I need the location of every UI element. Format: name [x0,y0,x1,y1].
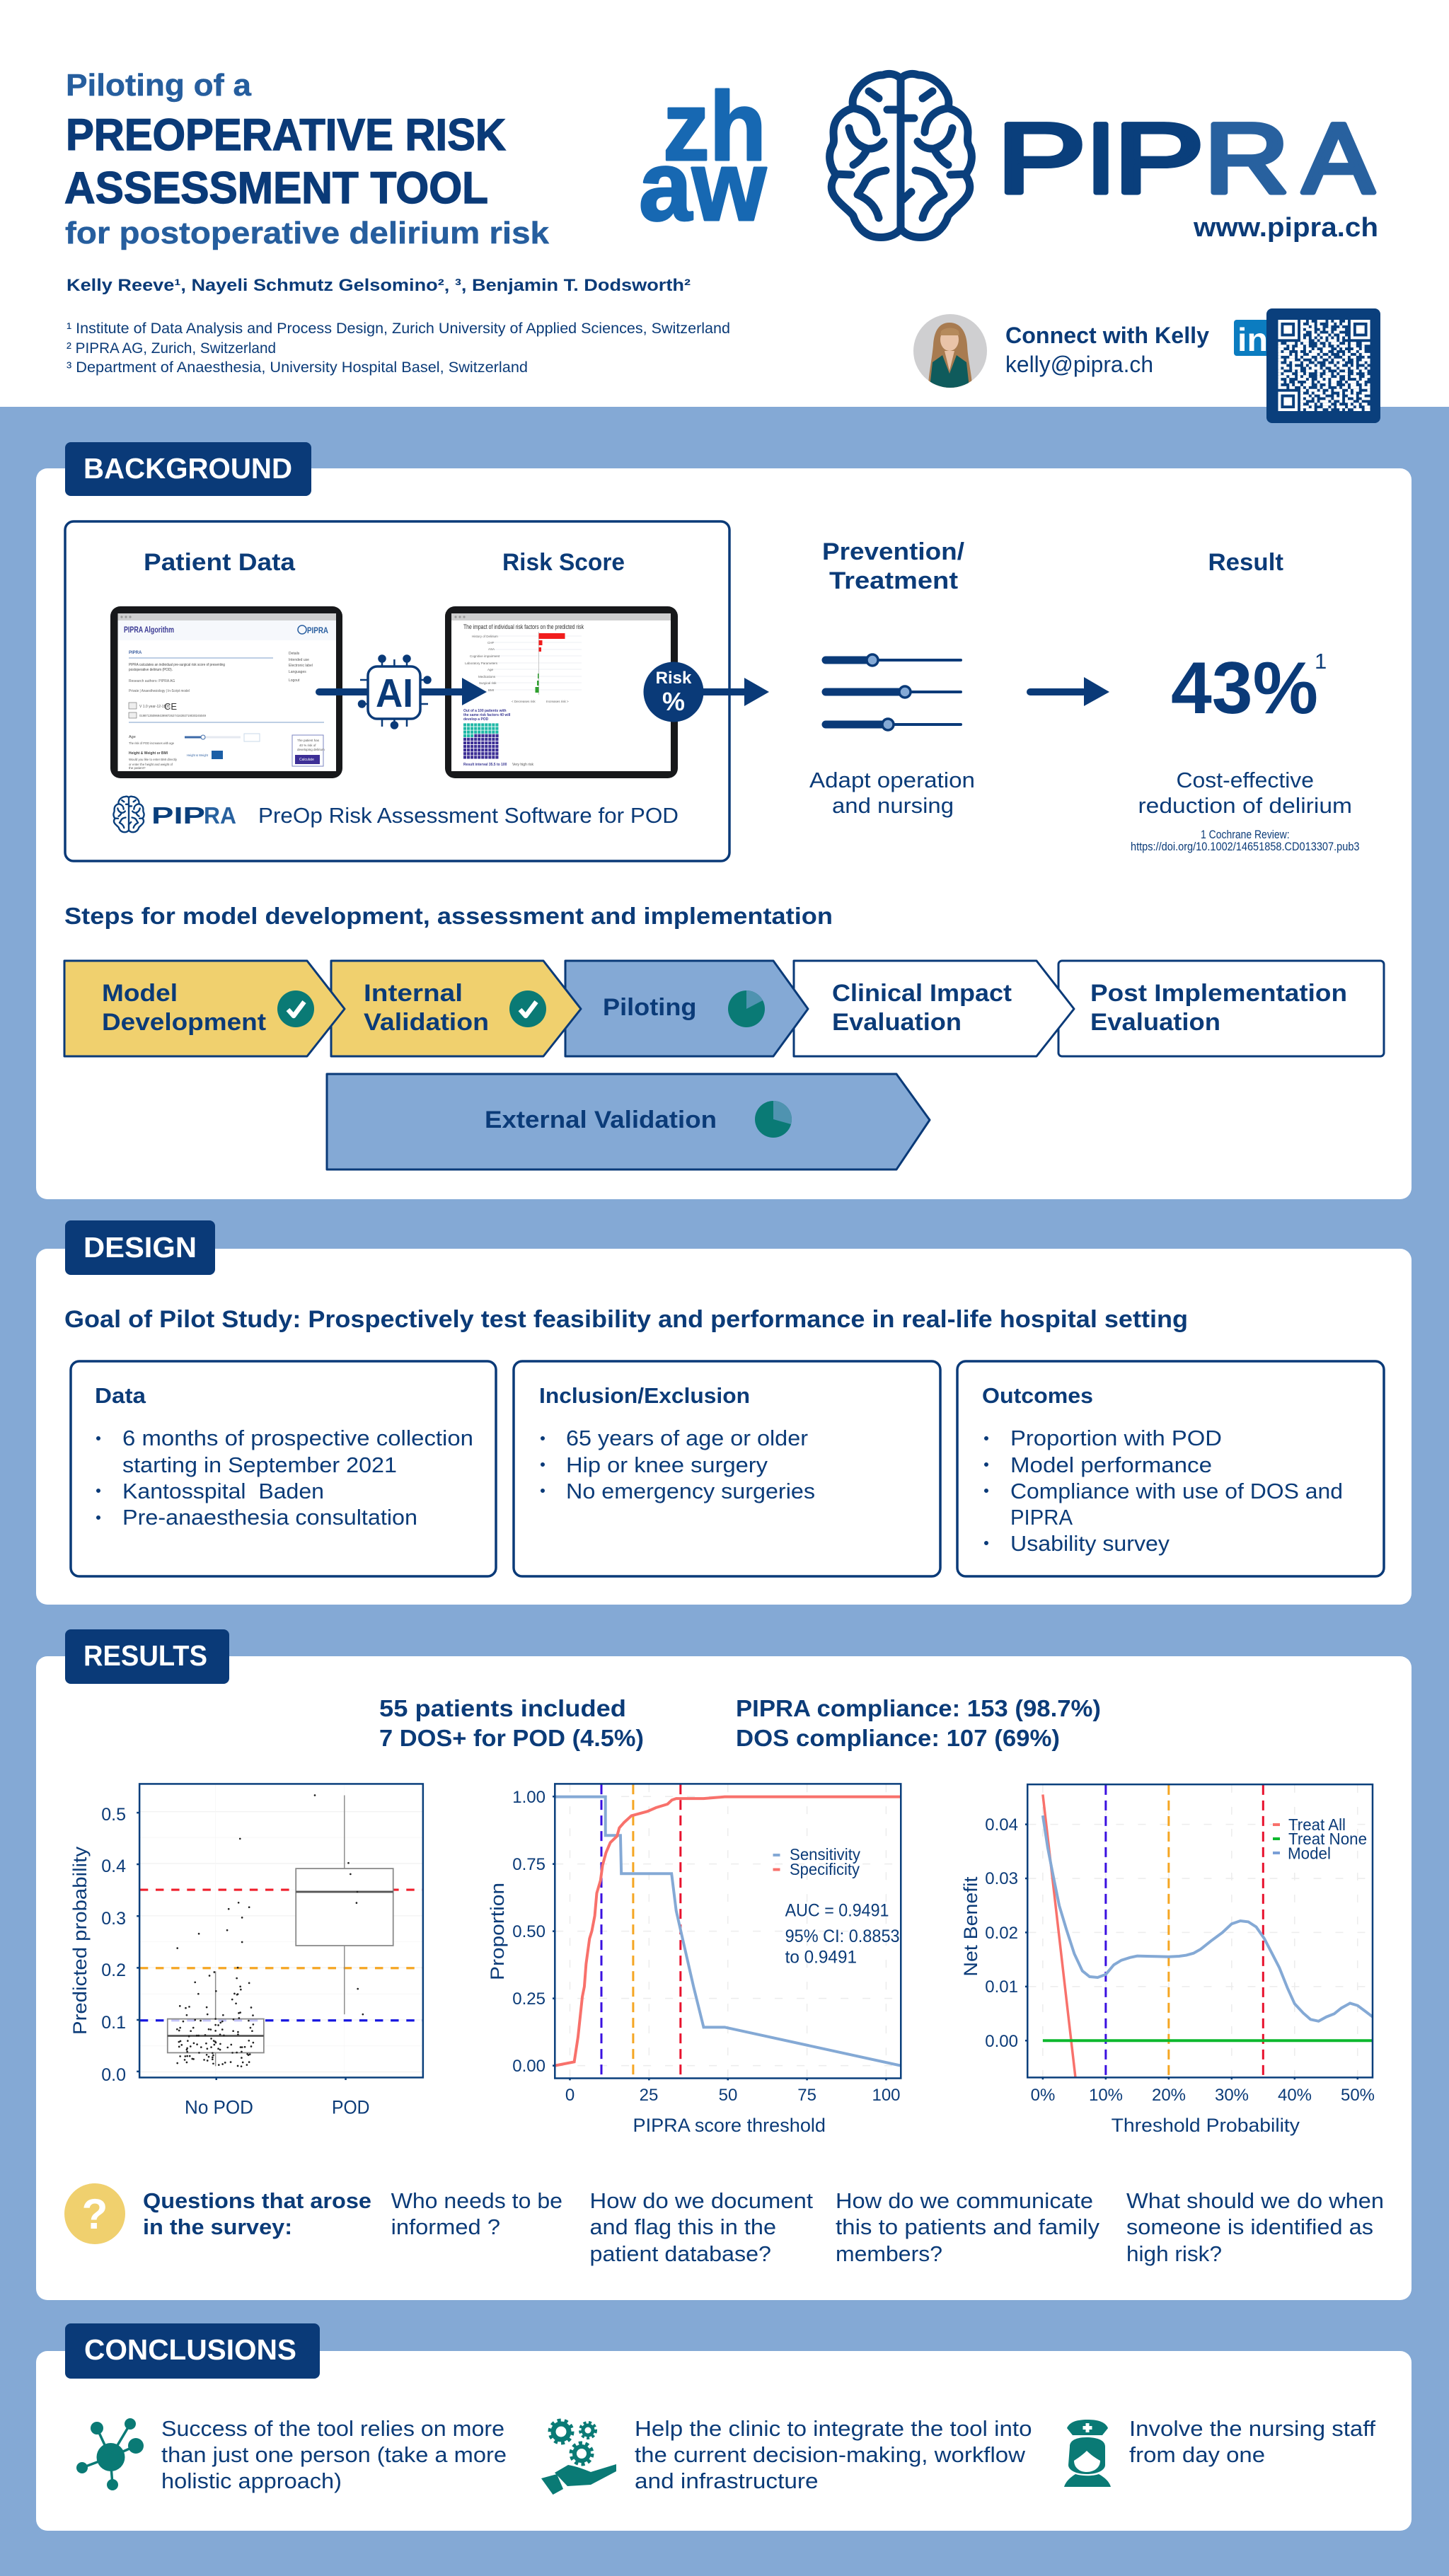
panel: conclusions [36,2323,1412,2531]
survey questions [64,2183,1384,2266]
column: result: reduction of delirium [1138,793,1352,818]
tablet: input form: PIPRA calculates an individual pre-surgical risk score of presenting [129,663,225,667]
contact text: kelly@pipra.ch [1005,352,1153,377]
card: data: 6 months of prospective collection [122,1426,473,1450]
chart: sensitivity and specificity: 50 [719,2086,737,2105]
title block: Piloting of a [66,68,252,103]
tablet: input form: Height & Weight [187,753,209,757]
affiliations [67,320,730,376]
card: data: Pre-anaesthesia consultation [122,1505,417,1530]
axis labels: 0.0 [101,2065,126,2085]
affiliations: ³ Department of Anaesthesia, University Hospital Basel, Switzerland [67,359,528,376]
authors: Kelly Reeve¹, Nayeli Schmutz Gelsomino²‚ ³, Benjamin T. Dodsworth² [67,276,691,295]
tablet: input form: V 1.0 year-12-1508 [139,705,170,709]
question 2: How do we document [590,2188,813,2213]
title block: ASSESSMENT TOOL [64,163,488,213]
heading: risk score: Risk Score [502,549,625,576]
question 2: patient database? [590,2241,771,2266]
heading: BACKGROUND: BACKGROUND [83,452,292,485]
tablet: risk output: The impact of individual risk factors on the predicted risk [463,623,584,630]
conclusion 2: and infrastructure [635,2468,819,2493]
software box [65,521,729,861]
step: clinical impact evaluation: Evaluation [832,1009,962,1036]
chart: sensitivity and specificity: 100 [872,2086,901,2105]
tablet: input form: Research authors: PIPRA AG [129,679,175,683]
conclusion 3: from day one [1129,2442,1265,2467]
tablet: input form: 40 % risk of [299,744,316,747]
step: internal validation [331,961,581,1056]
goal statement: Goal of Pilot Study: Prospectively test feasibility and performance in real-life hospital setting [64,1306,1188,1333]
chart: decision curve net benefit: 40% [1278,2086,1312,2105]
panel: results [36,1629,1412,2300]
column: result: Result [1208,549,1283,576]
chart: decision curve net benefit: 0% [1031,2086,1055,2105]
conclusion 2: Help the clinic to integrate the tool into [635,2416,1032,2441]
question 3 [836,2188,1100,2266]
tablet: risk output: develop a POD [463,717,489,722]
chart: sensitivity and specificity: 25 [640,2086,658,2105]
card: inclusion / exclusion: No emergency surgeries [566,1479,815,1503]
key numbers: compliance: PIPRA compliance: 153 (98.7%) [736,1695,1101,1721]
step: model development: Model [102,980,178,1007]
AUC annotation: 95% CI: 0.8853 [785,1927,900,1946]
card: data: starting in September 2021 [122,1452,397,1477]
card: outcomes [957,1361,1384,1576]
tablet: input form: PIPRA Algorithm [124,625,174,635]
AUC annotation: to 0.9491 [785,1948,857,1968]
step: piloting [565,961,808,1056]
tablet: input form: The risk of POD increases with age [129,741,174,746]
column: prevention / treatment: and nursing [832,793,954,818]
axis labels: 0.1 [101,2013,126,2033]
tablet: risk output: Laboratory Parameters [465,662,498,665]
step: post implementation evaluation: Post Implementation [1090,980,1347,1007]
chart: predicted probability box plot: Predicted probability [69,1846,91,2035]
tablet: input form: Would you like to enter BMI directly [129,758,178,761]
chart: predicted probability box plot [69,1784,423,2118]
legend: Model [1288,1844,1331,1862]
question 1: Who needs to be [391,2188,562,2213]
tablet: input form: Electronic label [289,664,313,668]
chart: sensitivity and specificity: Proportion [487,1883,508,1980]
badge: risk percent: % [662,687,685,716]
tablet: risk output: Medications [478,675,496,678]
question 4: What should we do when [1126,2188,1384,2213]
QR code [1266,308,1380,423]
logo: brain icon [830,74,971,238]
step: post implementation evaluation: Evaluation [1090,1009,1220,1036]
conclusion 2 [635,2416,1032,2493]
tablet: input form: or enter the height and weight of [129,763,173,766]
question 4: someone is identified as [1126,2214,1373,2239]
tablet: risk output: Very high risk [512,763,534,767]
AUC annotation [785,1901,900,1968]
chart: sensitivity and specificity: 0 [565,2086,575,2105]
tablet: input form: CE [164,701,177,712]
survey label: Questions that arose [143,2188,371,2213]
tablet: risk output: < Decreases risk [512,700,536,703]
legend: Treat All [1288,1815,1346,1834]
card: inclusion / exclusion: 65 years of age or older [566,1426,808,1450]
tablet: risk output: the same risk factors 40 will [463,713,511,717]
conclusion 2: the current decision-making, workflow [635,2442,1026,2467]
column: prevention / treatment [809,538,975,818]
heading: CONCLUSIONS: CONCLUSIONS [84,2333,296,2366]
column: prevention / treatment: Treatment [829,567,958,594]
axis labels: 0.5 [101,1805,126,1825]
card: data: Data [95,1383,146,1408]
card: inclusion / exclusion: Inclusion/Exclusion [539,1383,750,1408]
tablet: input form: Details [289,652,300,656]
arrow: patient data to risk score [316,678,487,705]
axis labels: 1.00 [512,1788,545,1807]
conclusion 1: than just one person (take a more [161,2442,507,2467]
conclusion 3 [1129,2416,1375,2467]
affiliations: ¹ Institute of Data Analysis and Process Design, Zurich University of Applied Sciences, Switzerland [67,320,730,337]
key numbers: patients: 7 DOS+ for POD (4.5%) [379,1725,644,1751]
survey label: in the survey: [143,2214,292,2239]
icon: question mark [64,2183,125,2244]
tablet: risk output: Out of a 100 patients with [463,709,507,713]
card: inclusion / exclusion [514,1361,940,1576]
step: clinical impact evaluation: Clinical Impact [832,980,1012,1007]
icon: gears on hand [541,2420,616,2495]
affiliations: ² PIPRA AG, Zurich, Switzerland [67,340,276,357]
chart: decision curve net benefit: Net Benefit [960,1876,981,1977]
panel: background [36,442,1412,2531]
plot area [553,1784,901,2080]
axis labels: 0.2 [101,1960,126,1980]
axis labels: 0.75 [512,1855,545,1874]
legend [1273,1815,1367,1862]
logo: zhaw [639,72,767,241]
AUC annotation: AUC = 0.9491 [785,1901,889,1921]
tablet: risk output [445,606,678,778]
title block [64,68,550,250]
heading: RESULTS: RESULTS [83,1639,207,1672]
column: prevention / treatment: Prevention/ [822,538,965,565]
chart: predicted probability box plot: POD [332,2097,369,2118]
tablet: risk output: History of Delirium [472,635,498,638]
contact text [1005,323,1209,377]
logo: PIPRA wordmark: P [1114,103,1204,214]
tablet: input form: Age [129,735,136,739]
legend [773,1845,860,1878]
logo: zhaw: zh [663,72,766,181]
question 3: this to patients and family [836,2214,1100,2239]
tablet: risk output: Result interval 35.5 to 100 [463,763,507,767]
tablet: risk output: Age [487,668,494,671]
conclusion 1 [161,2416,507,2493]
icon: sliders [826,654,961,730]
chart: decision curve net benefit: Threshold Probability [1112,2115,1300,2136]
axis labels: 0.02 [985,1924,1018,1943]
icon: question mark: ? [82,2190,108,2238]
tablet: input form: Logout [289,678,300,683]
axis labels [985,1815,1018,2051]
portrait photo [913,314,988,388]
heading: DESIGN [65,1220,215,1275]
column: result: https://doi.org/10.1002/14651858.CD013307.pub3 [1131,840,1360,853]
tablet: input form: Calculate [299,758,314,762]
tablet: input form: Languages [289,670,306,674]
conclusion 1: Success of the tool relies on more [161,2416,504,2441]
key numbers: patients [379,1695,644,1751]
tablet: input form: PIPRA [129,651,142,655]
chart: decision curve net benefit: 10% [1089,2086,1123,2105]
logo: small PIPRA: PIP [151,802,205,828]
question 3: How do we communicate [836,2188,1093,2213]
icon: nurse [1064,2420,1111,2487]
logo: small PIPRA: RA [204,802,236,828]
column: result: 1 Cochrane Review: [1201,828,1290,841]
icon: check [509,990,546,1027]
heading: CONCLUSIONS [65,2323,320,2379]
question 2: and flag this in the [590,2214,776,2239]
tablet: risk output: Increases risk > [546,700,569,703]
card: outcomes: Usability survey [1010,1531,1170,1556]
question 3: members? [836,2241,942,2266]
question 1 [391,2188,562,2239]
icon: AI chip [359,655,430,729]
column: prevention / treatment: Adapt operation [809,768,975,792]
axis labels: 0.00 [512,2057,545,2076]
key numbers: compliance: DOS compliance: 107 (69%) [736,1725,1060,1751]
tablet: input form: 0198713509694399872627416392719030245049 [139,714,206,717]
badge: risk percent [644,662,703,722]
chevron flow: development steps [64,961,1384,1169]
title block: for postoperative delirium risk [65,216,550,250]
icon: network [76,2418,144,2490]
question 2 [590,2188,813,2266]
tablet: input form [110,606,342,778]
panel: design [36,1220,1412,1605]
axis labels: 0.01 [985,1977,1018,1997]
chart: decision curve net benefit: 30% [1215,2086,1249,2105]
column: result [1131,549,1360,853]
step: model development: Development [102,1009,266,1036]
icon: progress pie [755,1101,792,1138]
step: internal validation: Validation [364,1009,489,1036]
chart: sensitivity and specificity: 75 [797,2086,816,2105]
heading: patient data: Patient Data [144,549,296,576]
heading: RESULTS [65,1629,229,1684]
tablet: risk output: Cognitive impairment [470,654,500,658]
badge: risk percent: Risk [656,669,692,688]
logo: PIPRA wordmark: A [1303,103,1375,214]
logo: PIPRA wordmark: I [1087,103,1115,214]
axis labels: 0.04 [985,1815,1018,1835]
heading: steps: Steps for model development, assessment and implementation [64,903,833,929]
chart: sensitivity and specificity: PIPRA score threshold [633,2115,826,2136]
chart: decision curve net benefit: 20% [1152,2086,1186,2105]
step: clinical impact evaluation [794,961,1074,1056]
software caption: PreOp Risk Assessment Software for POD [258,803,679,828]
chart: decision curve net benefit [960,1784,1375,2136]
step: post implementation evaluation [1058,961,1384,1056]
logo: zhaw: aw [639,130,767,241]
step: internal validation: Internal [364,980,463,1007]
title block: PREOPERATIVE RISK [66,110,506,160]
key numbers: compliance [736,1695,1101,1751]
axis labels [512,1788,545,2076]
header band [0,0,1449,407]
card: data: Kantosspital Baden [122,1479,324,1503]
chart: predicted probability box plot: No POD [185,2097,253,2118]
conclusion 1: holistic approach) [161,2468,342,2493]
logo: PIPRA wordmark: P [997,103,1086,214]
card: data [71,1361,496,1576]
card: outcomes: Compliance with use of DOS and [1010,1479,1343,1503]
card: outcomes: Outcomes [982,1383,1093,1408]
axis labels: 0.25 [512,1989,545,2009]
survey label [143,2188,371,2239]
arrow: box to prevention [703,678,769,706]
column: result: Cost-effective [1176,768,1314,792]
icon: AI chip: AI [376,671,413,716]
heading: BACKGROUND [65,442,311,496]
question 4 [1126,2188,1384,2266]
card: outcomes: Model performance [1010,1452,1212,1477]
legend: Treat None [1288,1830,1367,1848]
step: piloting: Piloting [603,994,696,1021]
tablet: risk output: ASA [488,647,495,651]
tablet: input form: Private | Anaesthesiology | In-Script model [129,689,190,693]
step: model development [64,961,345,1056]
axis labels: 0.03 [985,1869,1018,1888]
conclusion 3: Involve the nursing staff [1129,2416,1375,2441]
contact text: Connect with Kelly [1005,323,1209,348]
chart: sensitivity and specificity [487,1784,901,2136]
website: www.pipra.ch [1193,213,1378,243]
axis labels: 0.00 [985,2032,1018,2051]
key numbers: patients: 55 patients included [379,1695,626,1721]
tablet: risk output: BMI [488,688,494,692]
axis labels: 0.4 [101,1856,126,1876]
card: inclusion / exclusion: Hip or knee surgery [566,1452,768,1477]
icon: progress pie [728,990,765,1027]
arrow: prevention to result [1027,677,1109,706]
step: external validation [327,1074,930,1169]
card: outcomes: PIPRA [1010,1505,1073,1530]
tablet: input form: Height & Weight or BMI [129,751,168,756]
tablet: input form: The patient has [297,739,320,742]
icon: check [277,990,314,1027]
tablet: input form: PIPRA [307,625,328,635]
axis labels: 0.50 [512,1922,545,1941]
card: outcomes: Proportion with POD [1010,1426,1222,1450]
chart: decision curve net benefit: 50% [1341,2086,1375,2105]
logo: PIPRA wordmark: R [1204,103,1289,214]
plot area [1025,1784,1373,2079]
tablet: risk output: CHF [487,641,494,645]
axis labels [101,1805,126,2085]
plot area [137,1784,423,2080]
column: result: 43% [1171,647,1318,729]
column: result: 1 [1315,649,1327,674]
tablet: input form: the patient? [129,766,146,770]
legend: Specificity [790,1860,860,1878]
step: external validation: External Validation [485,1107,717,1133]
tablet: input form: developing delirium [297,748,325,751]
logo: PIPRA wordmark [997,103,1375,214]
question 1: informed ? [391,2214,500,2239]
legend: Sensitivity [790,1845,860,1864]
question 4: high risk? [1126,2241,1222,2266]
logo: small PIPRA [113,797,236,832]
heading: DESIGN: DESIGN [83,1231,197,1264]
tablet: input form: postoperative delirium (POD). [129,668,173,672]
tablet: input form: Intended use [289,658,309,662]
tablet: risk output: Surgical risk [479,681,497,685]
icon: LinkedIn: in [1237,321,1268,358]
axis labels: 0.3 [101,1909,126,1929]
